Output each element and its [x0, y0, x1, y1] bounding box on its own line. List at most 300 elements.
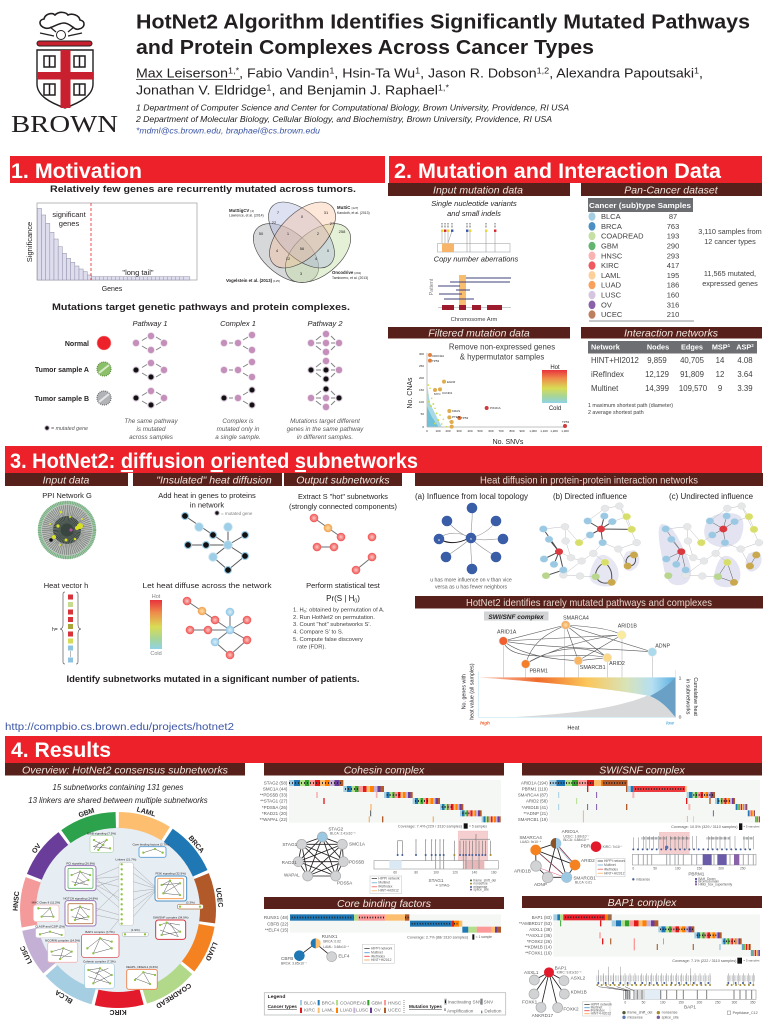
network a: local topology: u: [438, 537, 440, 542]
gene diagram: PBRM1: 150: [697, 866, 702, 870]
captions: The same pathway: [124, 418, 178, 425]
mutation matrix: BAP1: BAP1 (83): [532, 915, 552, 920]
network: cohesin: PDS5B: [349, 859, 364, 864]
scatter plot: [407, 352, 570, 446]
mutation matrix: cohesin: [260, 780, 501, 829]
list: test steps: 2. Run HotNet2 on permutation.: [293, 615, 375, 621]
gene diagram: STAG1: 80: [414, 870, 418, 874]
callout: SWI/SNF complex: [484, 612, 548, 621]
list: test steps: rate (FDR).: [297, 644, 326, 650]
network c: undirected influence: [659, 503, 763, 587]
venn diagram: Vogelstein et al. (2013) [125]: [226, 278, 280, 283]
conclusion text: Identify subnetworks mutated in a significant number of patients.: [66, 674, 360, 684]
panel: Pan-Cancer dataset: [581, 183, 762, 321]
panel heading: [5, 473, 128, 486]
table: networks: 109,570: [679, 384, 708, 393]
scatter plot: 1,000: [529, 429, 537, 433]
table: cancer types: COADREAD: [601, 232, 644, 240]
chart: heat distribution: heat value (all samples): [469, 663, 475, 720]
mutation matrix: cohesin: **STAG1 (27): [260, 799, 288, 804]
panel heading: Input mutation data: [433, 184, 523, 196]
network: hot subnetworks: [310, 514, 376, 574]
panel heading: [415, 473, 763, 486]
network: SWI/SNF: ARID2: [581, 858, 595, 863]
network: cohesin: WAPAL: [284, 873, 300, 878]
table: networks: Network: [591, 342, 621, 352]
gene diagram: BAP1: 200: [697, 1000, 702, 1004]
panel heading: [581, 183, 762, 196]
gene diagram: STAG1: missense: [473, 885, 488, 889]
network: SWI/SNF: ADNP: [534, 882, 547, 887]
chart: heat distribution: ADNP: [655, 643, 671, 649]
table: networks: MSP: [712, 342, 728, 352]
network: SWI/SNF: ARID1B: [514, 869, 531, 874]
callout: SWI/SNF complex: SWI/SNF complex: [488, 614, 544, 621]
legend: Inactivating SNV: [448, 999, 483, 1004]
subnetwork boxes: CLASP and C2IP (2%): [35, 924, 65, 928]
authors: 1: [266, 84, 272, 92]
scatter plot: No. SNVs: [493, 439, 524, 446]
captions: genes in the same pathway: [287, 426, 364, 433]
panel heading: [264, 763, 504, 776]
panel: insulated heat diffusion: [133, 473, 282, 659]
labels: cancer types: BLCA: [54, 988, 74, 1004]
chart: heat distribution: [462, 615, 698, 731]
text: overview summary: 15 subnetworks containing 131 genes: [53, 783, 184, 792]
network: mutated genes: [182, 512, 248, 574]
scatter plot: 1,300: [561, 429, 569, 433]
network: CBF: HIPPI network: [371, 946, 393, 950]
text: filter description: Remove non-expressed genes: [449, 342, 555, 352]
subnetwork boxes: Cohesin complex (7.3%): [83, 960, 116, 964]
graphic: heat vector: [52, 592, 81, 664]
bar chart: significance of genes: genes: [59, 219, 79, 228]
scatter plot: EGFR: [447, 380, 456, 384]
section 1 heading: [10, 156, 385, 183]
list: test steps: 4. Compare S' to S.: [293, 630, 344, 636]
venn diagram: 31: [324, 210, 329, 215]
panel heading: [522, 896, 762, 909]
text: SNV label: Single nucleotide variants: [431, 199, 517, 208]
scatter plot: 0: [426, 429, 428, 433]
captions: is mutated: [136, 426, 166, 433]
legend: LAML: [322, 1008, 334, 1013]
text: heat vector: Heat vector h: [44, 581, 88, 590]
row: tumor sample B: Tumor sample B: [35, 396, 89, 403]
subnetwork boxes: Core binding factors (2.7%): [133, 842, 169, 846]
table: cancer types: 195: [667, 271, 679, 280]
mutation matrix: BAP1: **FOXK1 (16): [525, 951, 552, 956]
subnetwork boxes: (3.3%): [186, 900, 195, 904]
venn diagram: MuSiC [127]: [337, 205, 358, 210]
title: and Protein Complexes Across Cancer Types: [136, 36, 594, 59]
subnetwork boxes: KEAP1, NFE2L1 (9.6%): [126, 965, 158, 969]
text: add heat: in network: [190, 500, 224, 510]
mutation matrix: cohesin: STAG2 (58): [264, 781, 288, 786]
list: test steps: 0: [304, 608, 307, 614]
table: cancer types: UCEC: [601, 310, 623, 319]
gene diagram: STAG1: ≡ STAG: [436, 883, 450, 888]
network: BAP1: FOXK1: [522, 1000, 538, 1005]
panel heading: Interaction networks: [624, 328, 719, 340]
chart: heat distribution: ARID2: [609, 661, 625, 667]
network: SWI/SNF: HINT+HI2012: [604, 871, 625, 875]
table: networks: 3.64: [737, 370, 753, 379]
chart: heat distribution: Heat: [567, 725, 580, 731]
panel heading: Input data: [43, 474, 90, 486]
chart: heat distribution: 1: [679, 675, 682, 681]
gene diagram: BAP1: splice_site: [662, 1015, 679, 1019]
copy number diagram: [429, 275, 511, 323]
table: cancer types: LAML: [601, 271, 621, 280]
mutation matrix: SWI/SNF: **ADNP (21): [523, 811, 548, 816]
table: cancer types: 210: [667, 310, 679, 319]
gene diagram: PBRM1: [632, 832, 756, 886]
subheads: (b) Directed influence: [553, 492, 627, 501]
table: networks: Multinet: [591, 384, 619, 393]
gene diagram: STAG1: STAG1: [429, 878, 444, 883]
venn diagram: 50: [259, 231, 264, 236]
gene diagram: BAP1: 50: [642, 1000, 646, 1004]
text: statistical test: Perform statistical test: [306, 581, 381, 590]
list: test steps: : obtained by permutation of A.: [306, 608, 385, 614]
mutation matrix: cohesin: *RAD21 (20): [262, 811, 288, 816]
mutation matrix: cohesin: **PDS5B (33): [260, 793, 288, 798]
legend: heat bar: Hot: [152, 594, 161, 600]
legend: GBM: [371, 1000, 382, 1005]
gene diagram: PBRM1: 100: [675, 866, 681, 870]
network: SWI/SNF: SMARCB1: [573, 875, 596, 880]
mutation matrix: BAP1: = 5 samples: [743, 959, 760, 963]
column labels: Pathway 2: [307, 319, 343, 328]
text: extract subnetworks: Extract S "hot" subnetworks: [298, 492, 388, 501]
scatter plot: 0: [422, 425, 424, 429]
network a: local topology: [430, 503, 512, 590]
table: cancer types: BRCA: [601, 222, 622, 231]
venn diagram: 4: [315, 256, 318, 261]
table: cancer types: HNSC: [601, 251, 623, 260]
network: CBF: HINT+HI2012: [371, 958, 392, 962]
legend: heat scale: Hot: [550, 365, 560, 371]
network: cohesin: STAG2: [328, 827, 344, 832]
mutation matrix: cohesin: *PDS5A (26): [262, 805, 288, 810]
legend: Legend: [268, 994, 285, 1000]
mutation matrix: BAP1: **AMBRD17 (53): [519, 921, 552, 926]
network a: local topology: u has more influence on v than vice: [430, 578, 512, 584]
legend: HNSC: [388, 1000, 402, 1005]
panel heading: [133, 473, 282, 486]
network: CBF: iRefIndex: [371, 954, 385, 958]
table: cancer types: 160: [667, 290, 679, 300]
captions: in different samples.: [297, 434, 353, 441]
table: cancer types: 763: [667, 222, 679, 231]
text: add heat: Add heat in genes to proteins: [158, 491, 256, 500]
table: cancer types: LUAD: [601, 280, 622, 290]
scatter plot: 150: [419, 388, 424, 392]
network: SWI/SNF: Multinet: [604, 863, 616, 867]
authors: Max Leiserson: [136, 66, 217, 80]
mutation matrix: CBF: [264, 914, 501, 940]
title: [136, 10, 750, 59]
panel heading: HotNet2 identifies rarely mutated pathways and complexes: [466, 597, 712, 609]
network: SWI/SNF: KIRC: 7x10⁻⁷: [603, 845, 623, 849]
gene diagram: BAP1: missense: [627, 1015, 643, 1019]
gene diagram: PBRM1: BAH_Down: [698, 877, 716, 881]
scatter plot: 700: [498, 429, 504, 433]
mutation matrix: SWI/SNF: ARID1A (194): [521, 781, 548, 786]
chart: heat distribution: in subnetworks: [685, 679, 691, 715]
legend: Deletion: [484, 1009, 502, 1014]
panel heading: "Insulated" heat diffusion: [156, 474, 272, 486]
authors: [136, 66, 703, 98]
venn diagram: 1: [287, 231, 290, 236]
mutation matrix: CBF: **ELF4 (15): [265, 927, 289, 932]
scatter plot: 400: [467, 429, 473, 433]
heading: few genes: Relatively few genes are recurrently mutated across tumors.: [50, 184, 356, 195]
network: BAP1: ASXL2: [571, 975, 586, 980]
mutation matrix: SWI/SNF: SMARCB1 (19): [518, 817, 548, 822]
text: filter description: [449, 342, 555, 362]
table: cancer types: LUSC: [601, 290, 622, 300]
panel: motivation: [25, 184, 370, 441]
legend: Cancer types: [268, 1004, 297, 1009]
network a: local topology: versa as u has fewer neighbors: [435, 584, 507, 590]
scatter plot: 200: [445, 429, 451, 433]
table: networks: 14: [716, 356, 725, 365]
gene diagram: BAP1: HIPPI network: [591, 1002, 612, 1006]
legend: [264, 993, 506, 1015]
gene diagram: PBRM1: HMG_box_superfamily: [698, 882, 733, 886]
labels: cancer types: COADREAD: [154, 981, 192, 1009]
chart: heat distribution: No. genes with: [462, 674, 468, 709]
link: http://compbio.cs.brown.edu/projects/hotnet2: [5, 721, 234, 733]
scatter plot: 1,200: [550, 429, 558, 433]
network: cohesin: RAD21: [282, 860, 297, 865]
table: cancer types: 290: [667, 242, 679, 250]
table: cancer types: GBM: [601, 242, 618, 250]
section 1 heading: 1. Motivation: [11, 160, 142, 183]
chart: heat distribution: PBRM1: [529, 669, 548, 675]
mutation matrix: CBF: CBFB (22): [267, 921, 289, 926]
text: extract subnetworks: [289, 492, 397, 511]
heading: pathways: Mutations target genetic pathways and protein complexes.: [52, 302, 350, 313]
legend: heat bar: [150, 594, 162, 657]
panel heading: Heat diffusion in protein-protein interaction networks: [480, 474, 698, 486]
gene diagram: PBRM1: Bromodomain: [698, 880, 719, 884]
table footnotes: 2 average shortest path: [588, 410, 644, 416]
table: cancer types: 87: [669, 212, 677, 221]
subnetwork boxes: PCl signaling (26.8%): [66, 861, 95, 865]
gene diagram: BAP1: [583, 967, 758, 1019]
table: cancer types: 316: [667, 300, 679, 309]
legend: heat scale: Cold: [549, 406, 561, 412]
venn diagram: 22: [272, 220, 277, 225]
panel: core binding factors: [264, 897, 504, 965]
gene diagram: BAP1: iRefIndex: [591, 1009, 605, 1013]
text: statistical test: 0: [354, 598, 357, 604]
panel: overview: [5, 763, 245, 1015]
table: networks: ASP: [736, 342, 751, 352]
scatter plot: TP53: [461, 416, 469, 420]
gene diagram: PBRM1: PBRM1: [688, 872, 705, 877]
captions: across samples: [129, 434, 174, 441]
text: let heat diffuse: Let heat diffuse across the network: [142, 581, 272, 590]
copy number diagram: Chromosome Arm: [451, 317, 498, 323]
chart: heat distribution: high: [480, 720, 490, 725]
labels: cancer types: BRCA: [187, 835, 205, 855]
scatter plot: 50: [421, 412, 424, 416]
authors: 1: [329, 66, 335, 76]
table: networks: iRefIndex: [591, 370, 624, 379]
row: normal: Normal: [65, 341, 89, 348]
text: statistical test: ): [357, 594, 360, 603]
affiliations: [135, 104, 569, 136]
gene diagram: STAG1: 100: [433, 870, 439, 874]
mutation matrix: CBF: RUNX1 (48): [264, 915, 289, 920]
authors: , Fabio Vandin: [239, 66, 329, 80]
network: cohesin: [282, 827, 366, 886]
venn diagram: Tamborero, et al. (2013): [332, 276, 368, 280]
gene diagram: PBRM1: missense: [636, 877, 650, 881]
gene diagram: STAG1: 120: [452, 870, 458, 874]
venn diagram: 27: [330, 221, 335, 226]
mutation matrix: cohesin: **WAPAL (22): [260, 817, 288, 822]
subheads: (a) Influence from local topology: [415, 492, 528, 501]
list: test steps: [293, 608, 385, 650]
labels: cancer types: HNSC: [13, 891, 21, 911]
authors: , and Benjamin J. Raphael: [271, 84, 438, 98]
panel heading: Core binding factors: [337, 898, 432, 910]
venn diagram: MutSigCV [4]: [229, 208, 254, 213]
legend: SNV: [484, 999, 494, 1004]
gene diagram: BAP1: 300: [732, 1000, 737, 1004]
panel: input data: [5, 473, 128, 664]
authors: 1,*: [438, 84, 449, 92]
authors: Jonathan V. Eldridge: [136, 84, 251, 98]
panel heading: [522, 763, 762, 776]
table: cancer types: OV: [601, 300, 612, 309]
table: networks: 3.39: [737, 384, 753, 393]
logo: Brown University: BROWN: [11, 112, 118, 138]
network: diffused heat: [183, 597, 251, 659]
text: dataset summary: 12 cancer types: [704, 237, 756, 246]
mutation matrix: BAP1: ASXL1 (38): [529, 927, 552, 932]
scatter plot: 1,100: [540, 429, 548, 433]
network: SWI/SNF: BLCA: 0.01: [575, 881, 592, 885]
network: cohesin: PDS5A: [337, 881, 353, 886]
graphic: heat vector: h=: [52, 627, 58, 633]
venn diagram: 12: [286, 256, 291, 261]
bar chart: significance of genes: [25, 203, 197, 293]
table: cancer types: Cancer (sub)type Samples: [589, 201, 691, 210]
venn diagram: [226, 190, 370, 294]
gene diagram: BAP1: Multinet: [591, 1006, 602, 1010]
labels: cancer types: [13, 806, 223, 1015]
scatter plot: 200: [419, 376, 424, 380]
chart: heat distribution: ARID1B: [618, 624, 637, 630]
graphic: PPI network ball: [38, 501, 96, 559]
labels: cancer types: LUSC: [19, 944, 34, 965]
copy number diagram: Patient: [429, 278, 435, 295]
network: BAP1: [522, 965, 587, 1018]
labels: cancer types: LAML: [136, 806, 157, 819]
table: networks: 12,129: [645, 370, 669, 379]
mutation matrix: BAP1: [519, 914, 760, 964]
labels: cancer types: KIRC: [109, 1008, 127, 1015]
subnetwork boxes: [32, 831, 203, 989]
logo: Brown University: [11, 12, 118, 138]
section 2 heading: 2. Mutation and Interaction Data: [394, 160, 721, 183]
venn diagram: 4: [276, 248, 279, 253]
venn diagram: Kandoth, et al. (2013): [337, 211, 370, 215]
network: SWI/SNF: iRefIndex: [604, 867, 618, 871]
table: cancer types: 293: [667, 251, 679, 260]
table: networks: Nodes: [647, 342, 669, 352]
legend: heat bar: Cold: [150, 651, 162, 657]
network: cohesin: SMC1A: [349, 842, 366, 847]
gene diagram: STAG1: splice_site: [473, 888, 489, 892]
scatter plot: 600: [488, 429, 494, 433]
subnetwork boxes: PI3K signaling (32.9%): [155, 871, 186, 875]
gene diagram: STAG1: frame_shift_del: [473, 878, 496, 882]
authors: 1,2: [537, 66, 550, 76]
key: mutated gene: = mutated gene: [51, 426, 88, 432]
labels: cancer types: GBM: [78, 808, 96, 819]
text: CNA label: Copy number aberrations: [434, 254, 519, 264]
panel: HotNet2 identifies rarely mutated pathways: [415, 596, 763, 731]
gene diagram: STAG1: [370, 831, 498, 893]
table footnotes: 1 maximum shortest path (diameter): [588, 403, 673, 409]
scatter plot: 100: [419, 400, 424, 404]
table: networks: [588, 341, 757, 393]
text: overview summary: [28, 783, 208, 805]
venn diagram: 56: [300, 246, 305, 251]
gene diagram: BAP1: 350: [750, 1000, 756, 1004]
labels: cancer types: LUAD: [204, 941, 218, 962]
venn diagram: 0: [301, 214, 304, 219]
chart: heat distribution: SMARCA4: [563, 615, 589, 621]
panel: heat diffusion in PPI networks: [415, 473, 763, 590]
network: SWI/SNF: SMARCA4: [519, 835, 542, 840]
legend: LUSC: [356, 1008, 369, 1013]
scatter plot: TP53: [562, 420, 570, 424]
panel heading: SWI/SNF complex: [599, 764, 686, 776]
network: BAP1: BAP1: [555, 965, 567, 970]
gene diagram with mutations: [438, 223, 510, 252]
authors: 1: [415, 66, 421, 76]
text: dataset summary: expressed genes: [702, 279, 758, 288]
title: HotNet2 Algorithm Identifies Significantly Mutated Pathways: [136, 10, 750, 34]
text: SNV label: [431, 199, 517, 218]
subnetwork boxes: MHC Class II (11.2%): [32, 901, 60, 905]
network: CBF: LAML: 3.68x10⁻⁴: [323, 945, 349, 949]
network: SWI/SNF: [514, 829, 626, 887]
panel: filtered mutation data: [388, 327, 570, 446]
scatter plot: CCND1: [442, 391, 453, 395]
section 3 heading: 3. HotNet2: diffusion oriented subnetworks: [10, 450, 418, 473]
gene diagram: BAP1: frame_shift_del: [627, 1011, 653, 1015]
gene diagram: STAG1: iRefIndex: [378, 885, 393, 889]
mutation matrix: CBF: = 1 sample: [476, 935, 492, 939]
labels: cancer types: UCEC: [214, 887, 223, 908]
network: CBF: Multinet: [371, 951, 383, 955]
venn diagram: Oncodrive [291]: [332, 270, 361, 275]
affiliations: *mdml@cs.brown.edu, braphael@cs.brown.edu: [136, 126, 321, 136]
legend: heat scale: [542, 365, 567, 412]
venn diagram: 258: [339, 229, 346, 234]
mutation matrix: SWI/SNF: Coverage: 10.5% (329 / 3110 samples): [671, 825, 738, 829]
mutation matrix: SWI/SNF: ARID2 (58): [526, 799, 548, 804]
